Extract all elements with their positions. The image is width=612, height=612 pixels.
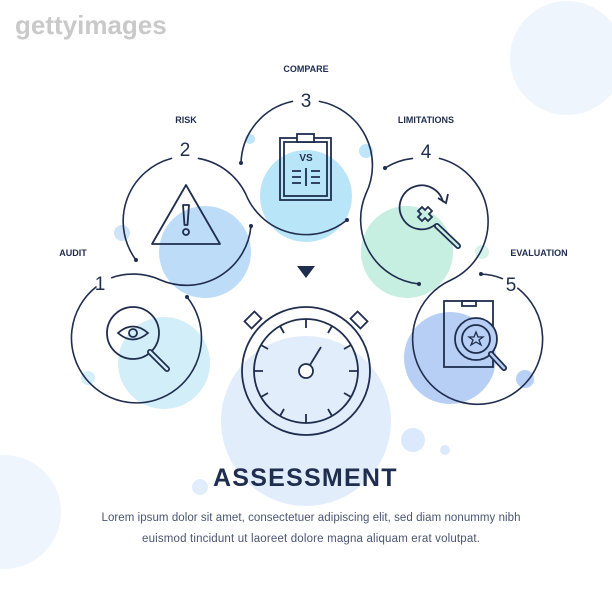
body text: Lorem ipsum dolor sit amet, consectetuer adipiscing elit, sed diam nonummy nibh [102,512,520,524]
icon: x magnifier [400,185,458,246]
icon: eye magnifier [107,307,167,369]
icon: vs clipboard [280,134,331,200]
step labels and numbers: RISK [175,115,197,125]
step labels and numbers: 3 [301,91,311,112]
step labels and numbers: 4 [421,142,432,163]
stopwatch [242,307,370,435]
arrow down [297,266,315,278]
step labels and numbers: EVALUATION [510,248,568,258]
color fill circles [118,150,496,409]
step labels and numbers: AUDIT [59,248,87,258]
icon: document star magnifier [444,301,504,368]
body text: euismod tincidunt ut laoreet dolore magna aliquam erat volutpat. [142,533,480,545]
icon: warning triangle [152,185,220,244]
step labels and numbers: 2 [180,140,190,161]
step labels and numbers: 5 [506,275,516,296]
dots [134,161,483,299]
step labels and numbers: COMPARE [283,64,329,74]
icon: vs clipboard: VS [299,153,313,164]
step labels and numbers: LIMITATIONS [398,115,454,125]
step labels and numbers [59,64,568,296]
title: ASSESSMENT [213,464,399,492]
watermark: gettyimages [15,10,167,40]
connecting path [71,101,543,404]
step labels and numbers: 1 [95,274,105,295]
body text [102,512,520,545]
